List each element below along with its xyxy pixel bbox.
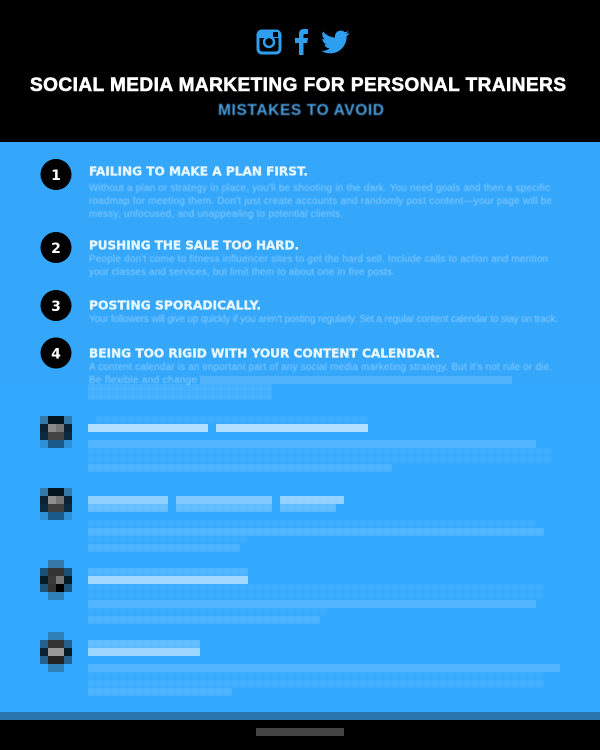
badge 8 bbox=[40, 632, 72, 672]
item 6 (pixelated) bbox=[40, 488, 544, 552]
icon: instagram bbox=[258, 31, 280, 53]
heading 8 bbox=[88, 640, 200, 656]
title: SOCIAL MEDIA MARKETING FOR PERSONAL TRAINERS bbox=[30, 75, 566, 96]
badge 5 bbox=[40, 416, 72, 448]
social icons bbox=[258, 29, 349, 55]
body 5 bbox=[88, 440, 552, 472]
badge 4: 4 bbox=[51, 346, 61, 362]
badge 1: 1 bbox=[51, 168, 61, 184]
badge 3 bbox=[40, 290, 72, 321]
icon: facebook bbox=[295, 29, 308, 55]
icon: twitter bbox=[321, 31, 349, 53]
item 3 bbox=[40, 290, 558, 325]
header panel bbox=[0, 0, 600, 142]
body 3: Your followers will give up quickly if you aren't posting regularly. Set a regular content calendar to stay on track. bbox=[89, 314, 558, 325]
body 2: People don't come to fitness influencer sites to get the hard sell. Include calls to action and mention bbox=[89, 254, 548, 265]
badge 2 bbox=[40, 232, 72, 263]
badge 7 bbox=[40, 560, 72, 600]
item 1 bbox=[40, 159, 553, 220]
body 4 bbox=[88, 362, 552, 400]
heading 2: PUSHING THE SALE TOO HARD. bbox=[89, 238, 299, 252]
body 2 bbox=[89, 254, 548, 278]
badge 2: 2 bbox=[51, 241, 61, 257]
item 4 bbox=[40, 338, 552, 400]
item 8 (pixelated) bbox=[40, 632, 560, 696]
body 4: A content calendar is an important part of any social media marketing strategy. But it's not rule or die. bbox=[89, 362, 552, 373]
body 7 bbox=[88, 584, 544, 624]
subtitle: MISTAKES TO AVOID bbox=[218, 102, 384, 119]
heading 4: BEING TOO RIGID WITH YOUR CONTENT CALENDAR. bbox=[89, 346, 440, 360]
badge 6 bbox=[40, 488, 72, 520]
body 4: Be flexible and change bbox=[89, 375, 198, 386]
body 8 bbox=[88, 664, 560, 696]
blue background panel bbox=[0, 142, 600, 712]
footer text block bbox=[256, 728, 344, 736]
body 1: Without a plan or strategy in place, you'll be shooting in the dark. You need goals and then a specific bbox=[89, 183, 550, 194]
body 6 bbox=[88, 520, 544, 552]
body 1: roadmap for meeting them. Don't just create accounts and randomly post content—your page will be bbox=[89, 196, 553, 207]
heading 6 bbox=[88, 496, 344, 512]
body 1 bbox=[89, 183, 553, 220]
item 2 bbox=[40, 232, 548, 278]
heading 1: FAILING TO MAKE A PLAN FIRST. bbox=[89, 164, 308, 178]
item 7 (pixelated) bbox=[40, 560, 544, 624]
body 2: your classes and services, but limit them to about one in five posts. bbox=[89, 267, 395, 278]
item 5 (pixelated) bbox=[40, 416, 552, 472]
heading 5 bbox=[88, 416, 368, 432]
badge 3: 3 bbox=[51, 299, 61, 315]
heading 7 bbox=[88, 568, 248, 584]
footer bbox=[0, 712, 600, 750]
badge 4 bbox=[40, 338, 72, 368]
heading 3: POSTING SPORADICALLY. bbox=[89, 298, 261, 312]
body 1: messy, unfocused, and unappealing to potential clients. bbox=[89, 209, 343, 220]
badge 1 bbox=[40, 159, 72, 190]
